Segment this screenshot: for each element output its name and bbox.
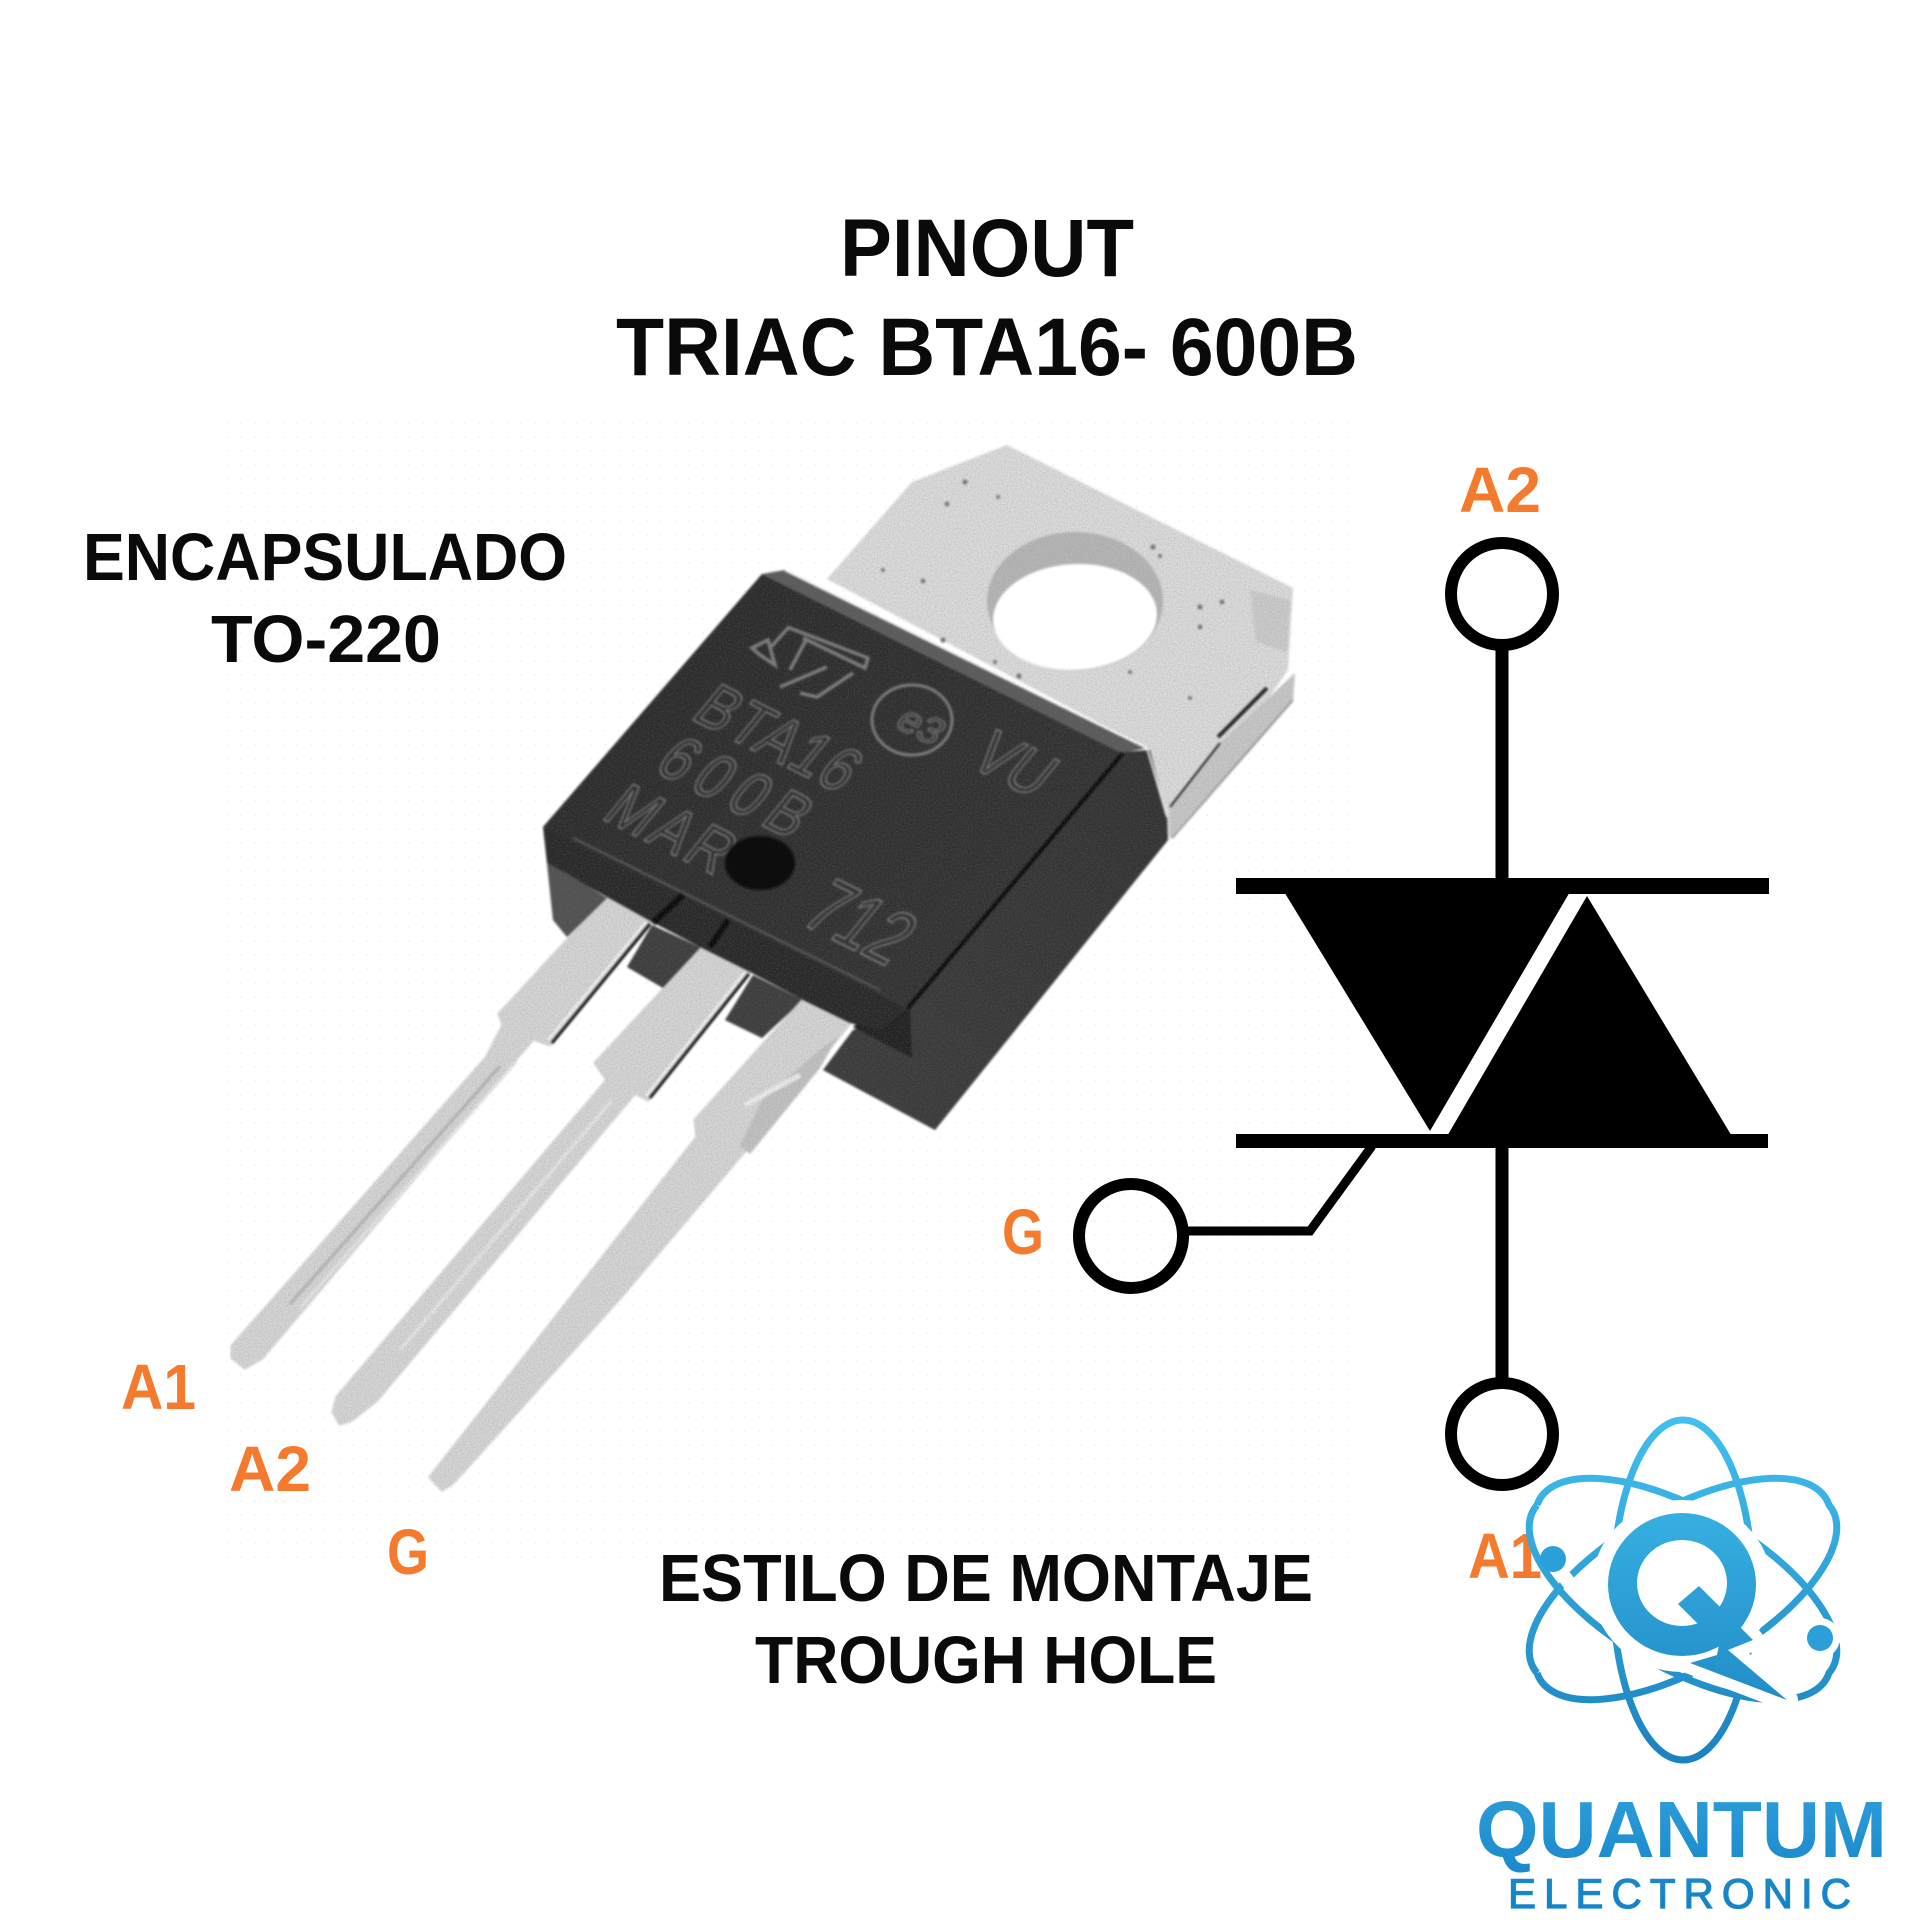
device markings: 600B [643, 723, 829, 851]
wordmark: ELECTRONIC [1508, 1870, 1851, 1917]
mounting hole [990, 560, 1160, 674]
plastic body [543, 570, 1168, 1130]
device markings: VU [958, 718, 1073, 810]
triangle up [1446, 896, 1733, 1138]
orbit gaps [1556, 1500, 1840, 1700]
package label: TO-220 [211, 602, 441, 677]
device markings: MAR [591, 771, 753, 887]
terminal A2 [1451, 543, 1553, 880]
lead A1 [232, 897, 652, 1368]
label A2 lead: A2 [229, 1433, 311, 1505]
device markings: e3 [887, 699, 955, 753]
connector blocks [627, 925, 803, 1038]
triangle down [1283, 890, 1571, 1131]
mounting style label [659, 1541, 1313, 1698]
ejector dot [725, 836, 795, 890]
label G schematic: G [1002, 1196, 1044, 1268]
device markings [591, 627, 1073, 981]
label G lead: G [387, 1516, 429, 1588]
dotted photo background [220, 420, 1360, 1560]
package label: ENCAPSULADO [83, 520, 567, 595]
title: TRIAC BTA16- 600B [616, 302, 1358, 393]
label A1 lead: A1 [121, 1351, 196, 1423]
logo: Quantum Electronic [1476, 1420, 1887, 1917]
TO-220 component illustration [232, 445, 1295, 1490]
triac schematic symbol [1079, 543, 1769, 1485]
label A1 schematic: A1 [1468, 1520, 1542, 1592]
device markings: 712 [786, 864, 934, 981]
metal mounting tab [827, 445, 1295, 840]
mounting style label: TROUGH HOLE [755, 1623, 1217, 1698]
lead A2 [333, 948, 750, 1424]
wordmark [1476, 1785, 1887, 1917]
mounting style label: ESTILO DE MONTAJE [659, 1541, 1313, 1616]
lead G [430, 1000, 850, 1490]
title [616, 203, 1358, 393]
bottom bar [1236, 1134, 1768, 1148]
title: PINOUT [840, 203, 1134, 294]
letter Q with bolt [1608, 1513, 1787, 1700]
pin labels [121, 454, 1542, 1592]
top bar [1236, 878, 1769, 894]
device markings: BTA16 [680, 671, 878, 804]
package label [83, 520, 567, 677]
terminal A1 [1451, 1146, 1553, 1485]
label A2 schematic: A2 [1459, 454, 1541, 526]
atom orbits [1529, 1420, 1837, 1760]
electrons [1540, 1546, 1833, 1651]
gate terminal [1079, 1146, 1372, 1288]
wordmark: QUANTUM [1476, 1785, 1887, 1874]
